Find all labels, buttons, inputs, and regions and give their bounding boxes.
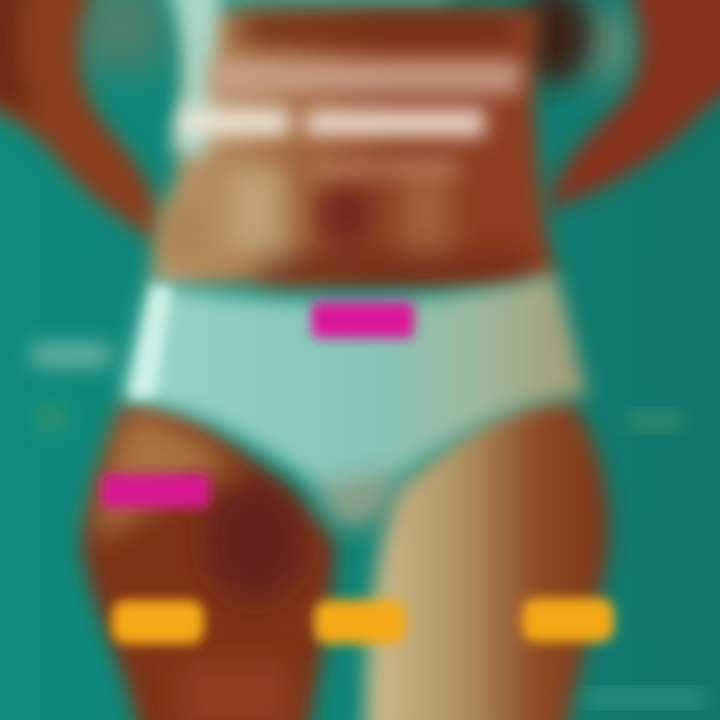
right thigh <box>365 400 609 720</box>
left thigh shading <box>95 410 305 720</box>
yellow label: centre <box>314 600 406 644</box>
abdomen shading <box>160 15 530 283</box>
underwear <box>122 272 588 515</box>
torso <box>150 10 555 285</box>
heading: blurred white title block <box>180 60 520 176</box>
yellow label: right <box>522 598 614 642</box>
underwear crotch shade <box>310 470 400 530</box>
top garment <box>165 0 450 160</box>
hair shadow <box>519 0 591 85</box>
left arm <box>0 0 165 245</box>
pink label: thigh <box>102 474 210 508</box>
right arm <box>545 0 720 210</box>
right side note <box>630 412 680 430</box>
background top shade <box>75 0 635 80</box>
left side note <box>32 344 110 428</box>
bottom right note <box>585 690 705 706</box>
left thigh <box>82 404 335 720</box>
underwear highlight <box>130 285 172 398</box>
pink label: waistband <box>312 302 414 338</box>
yellow label: left <box>112 600 204 644</box>
